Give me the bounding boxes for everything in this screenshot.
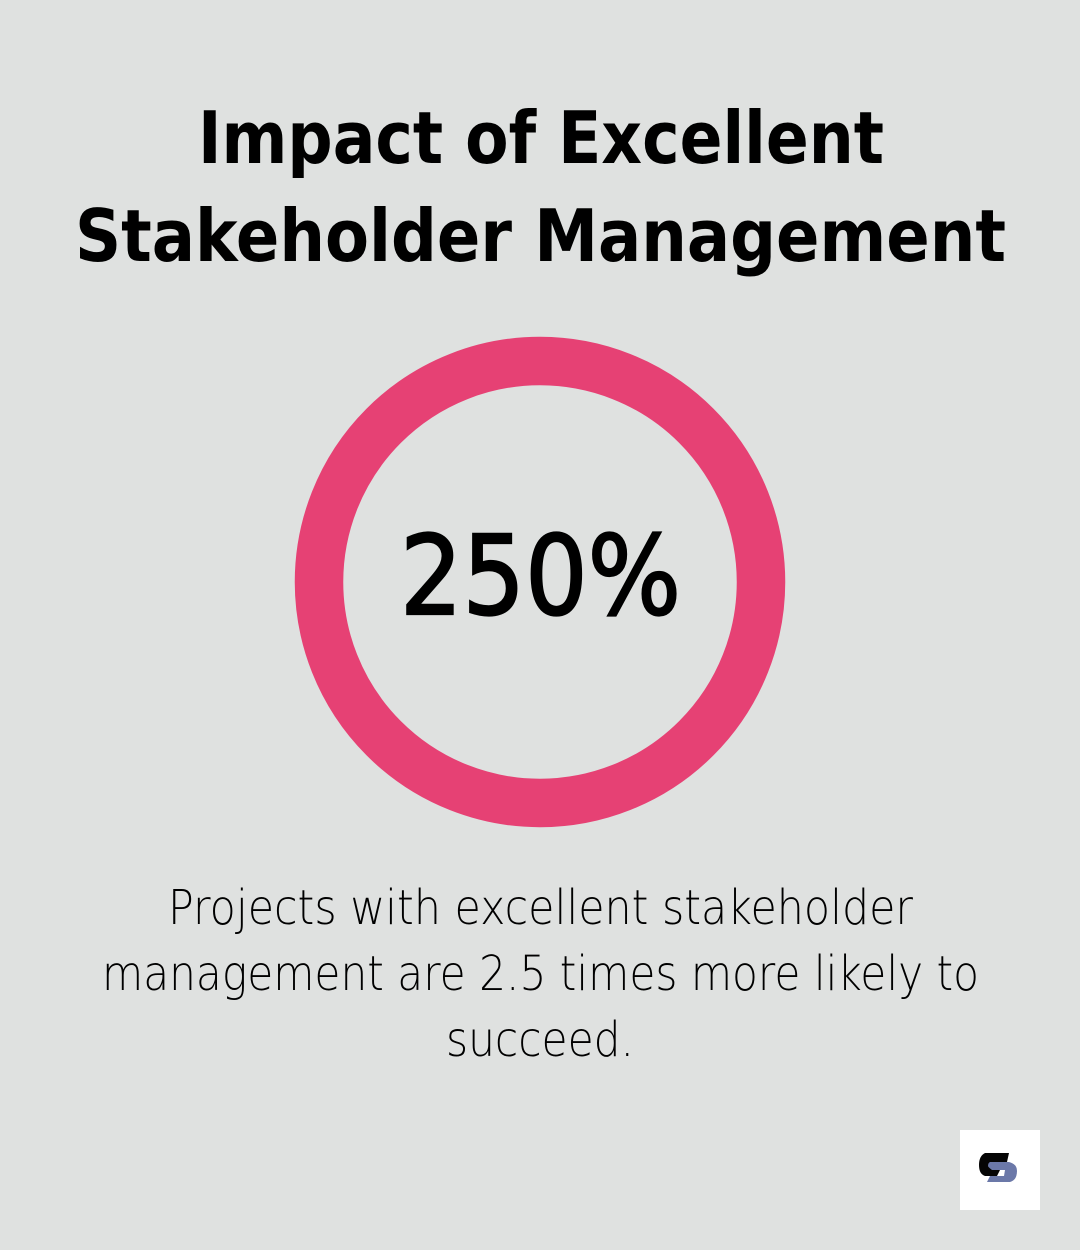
title	[75, 96, 1006, 278]
title: Impact of Excellent	[198, 96, 884, 180]
description	[102, 880, 979, 1068]
description: management are 2.5 times more likely to	[102, 946, 979, 1002]
metric: 250%: 250%	[400, 512, 681, 640]
description: Projects with excellent stakeholder	[168, 880, 913, 936]
description: succeed.	[446, 1012, 634, 1068]
ring chart	[319, 361, 761, 803]
logo badge	[960, 1130, 1040, 1210]
